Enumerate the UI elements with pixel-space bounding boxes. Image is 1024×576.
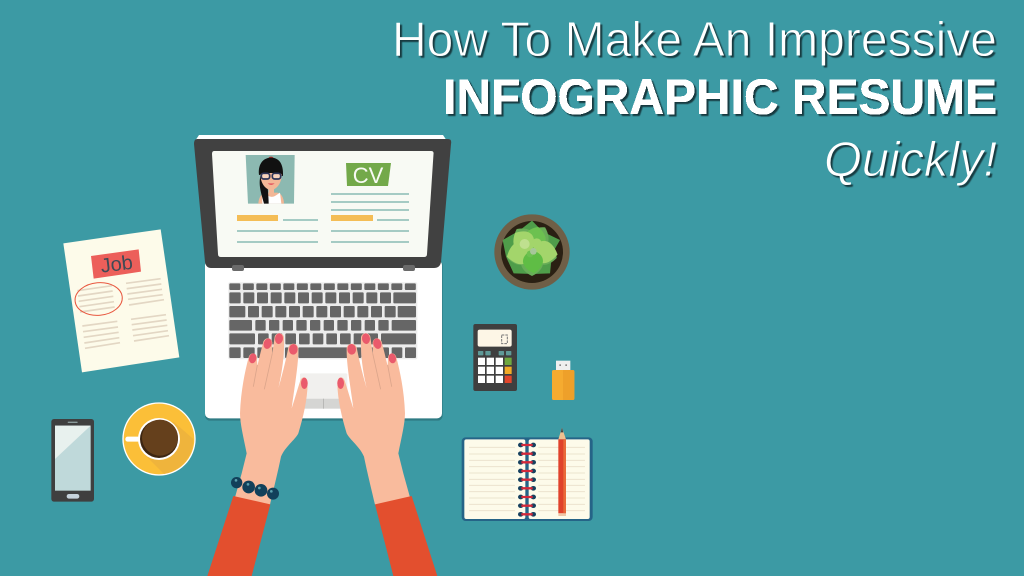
profile photo (246, 155, 295, 204)
right desk items (462, 214, 593, 521)
title: Quickly! (824, 133, 997, 187)
screen: CV (212, 151, 434, 257)
sleeve (207, 496, 270, 576)
paper text lines (77, 279, 169, 348)
left hand and sleeve (207, 333, 308, 576)
job label: Job (99, 252, 134, 278)
laptop lid (194, 135, 451, 271)
coffee cup (122, 402, 196, 476)
hands (207, 333, 437, 576)
laptop base (205, 260, 443, 421)
notebook (462, 428, 593, 521)
bracelet (231, 477, 279, 500)
touchpad (300, 373, 347, 409)
calculator (473, 324, 517, 391)
usb drive (552, 361, 574, 400)
plant pot (494, 214, 570, 290)
red circle (74, 281, 124, 317)
title: How To Make An Impressive (392, 13, 997, 67)
CV badge: CV (353, 163, 384, 188)
orange bars (237, 215, 373, 221)
spiral rings (518, 443, 536, 517)
keyboard (228, 282, 417, 359)
text lines (237, 193, 409, 243)
left desk items (51, 229, 196, 502)
CV badge (346, 163, 391, 188)
succulent (503, 221, 560, 276)
right hand and sleeve (337, 333, 437, 576)
title: INFOGRAPHIC RESUME (443, 69, 997, 125)
job label (91, 249, 141, 279)
title (392, 13, 997, 187)
phone (51, 419, 94, 502)
hinges (232, 265, 415, 271)
nails (248, 333, 308, 389)
job paper (63, 229, 179, 372)
pencil (558, 428, 566, 516)
